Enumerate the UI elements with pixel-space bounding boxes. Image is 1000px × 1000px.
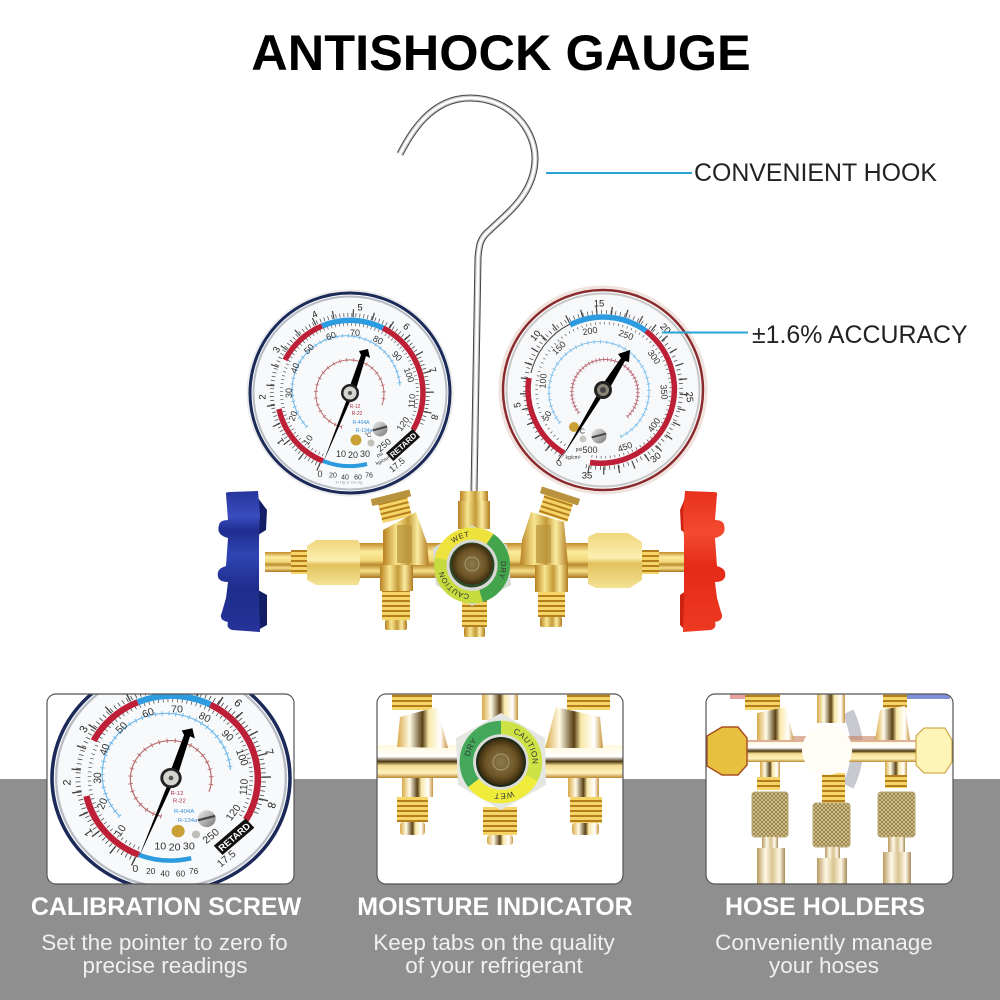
zoomed gauge: 0	[132, 864, 138, 875]
text: calibration screw: precise readings	[82, 953, 248, 978]
indicator ring: CAUTION	[514, 728, 538, 764]
zoomed gauge: 60	[176, 870, 186, 878]
inner numbers: 30	[284, 388, 294, 398]
zoomed gauge: 5	[180, 676, 186, 688]
indicator ring: WET	[494, 792, 515, 800]
numbers: 35	[582, 470, 592, 482]
inner numbers: 80	[371, 333, 385, 347]
zoomed gauge: 2	[61, 780, 74, 786]
left gauge	[248, 290, 452, 496]
inner numbers: in Hg or cm Hg	[336, 480, 362, 484]
refrigerant scales	[292, 336, 400, 427]
numbers: kg/cm²	[566, 455, 581, 461]
hook	[400, 98, 535, 492]
numbers: 20	[657, 321, 673, 337]
text: calibration screw: CALIBRATION SCREW	[31, 893, 302, 921]
outer numbers: 1	[275, 436, 287, 446]
text: calibration screw	[31, 893, 302, 978]
inner numbers: 40	[289, 362, 301, 374]
needle	[323, 349, 370, 463]
text: moisture indicator	[357, 893, 633, 978]
left stem	[265, 550, 307, 574]
pressure band	[528, 317, 674, 463]
outer numbers: 8	[428, 413, 440, 421]
indicator ring: DRY	[464, 738, 476, 756]
inner numbers: 10	[301, 433, 315, 447]
zoomed gauge	[50, 694, 292, 884]
pressure band	[279, 320, 423, 466]
numbers: °C	[577, 428, 585, 436]
text: hose holders: Conveniently manage	[715, 930, 933, 955]
zoomed gauge: 20	[146, 867, 156, 876]
right flare nut	[588, 533, 642, 588]
centre stem	[458, 491, 490, 637]
inner numbers: R-404A	[353, 420, 370, 426]
zoomed gauge: 30	[183, 842, 195, 852]
text: moisture indicator: MOISTURE INDICATOR	[357, 893, 633, 921]
text: moisture indicator: Keep tabs on the quality	[373, 930, 615, 955]
refrigerant scales	[549, 342, 649, 437]
needle	[561, 350, 630, 459]
numbers: 5	[512, 401, 524, 409]
inner numbers: 0	[317, 469, 323, 479]
inner numbers: psi	[376, 451, 384, 459]
numbers: 200	[582, 325, 598, 337]
numbers	[512, 298, 695, 482]
text: hose holders: HOSE HOLDERS	[725, 893, 925, 921]
inner numbers: R-22	[352, 411, 363, 417]
inner numbers	[284, 328, 418, 484]
inner numbers: 250	[375, 436, 393, 454]
numbers: 300	[646, 348, 662, 366]
inner numbers: 110	[406, 393, 418, 409]
inner numbers: 30	[360, 449, 370, 459]
zoomed gauge: 10	[154, 842, 166, 852]
zoomed gauge: 20	[96, 797, 111, 811]
zoomed gauge: R-12	[171, 791, 183, 797]
zoomed gauge: 50	[114, 720, 131, 736]
inner numbers: 100	[402, 366, 416, 384]
inner numbers: 70	[350, 328, 360, 338]
numbers: 350	[658, 384, 670, 400]
zoomed gauge: R-404A	[174, 809, 194, 815]
indicator ring	[456, 713, 546, 810]
outer numbers: 7	[426, 366, 438, 374]
right stem	[642, 550, 684, 574]
calibration screw	[569, 422, 606, 444]
moisture indicator: WET	[450, 532, 468, 542]
inner numbers: 20	[287, 410, 299, 422]
zoomed gauge: 60	[141, 707, 156, 721]
numbers: 100	[537, 373, 549, 389]
title: ANTISHOCK GAUGE	[251, 24, 751, 81]
zoomed gauge: 20	[169, 843, 181, 853]
zoomed gauge: 70	[171, 705, 183, 716]
zoomed gauge: R-134a	[178, 818, 198, 824]
outer numbers: 4	[310, 309, 320, 321]
retard tag: RETARD	[388, 431, 419, 460]
manifold body	[218, 446, 726, 637]
zoomed gauge: 7	[262, 748, 275, 756]
right gauge	[500, 287, 706, 493]
zoomed gauge: RETARD	[217, 821, 253, 853]
callout: accuracy: ±1.6% ACCURACY	[752, 321, 968, 349]
outer numbers: 5	[357, 302, 363, 314]
numbers: 15	[594, 298, 604, 310]
zoomed gauge: 17.5	[215, 849, 239, 870]
zoomed gauge: 10	[113, 823, 129, 839]
zoomed gauge: 76	[189, 867, 199, 876]
zoomed gauge: 8	[264, 801, 278, 810]
grey band	[0, 779, 1000, 1000]
bezel	[500, 287, 706, 493]
numbers: 25	[683, 391, 695, 403]
left valve body	[371, 490, 429, 630]
numbers: 450	[616, 440, 634, 454]
numbers: 50	[540, 409, 554, 423]
inner numbers: R-12	[350, 404, 361, 410]
tick scales	[524, 310, 684, 470]
panel: moisture indicator	[376, 693, 624, 885]
zoomed gauge: R-22	[173, 799, 186, 805]
numbers: 250	[617, 328, 635, 342]
inner numbers: 20	[329, 472, 337, 480]
text: hose holders	[715, 893, 933, 978]
inner numbers: 76	[365, 472, 373, 480]
moisture indicator: CAUTION	[439, 572, 469, 599]
inner numbers: °C	[365, 433, 372, 439]
numbers: 150	[550, 339, 568, 357]
zoomed gauge: 3	[77, 724, 91, 735]
zoomed gauge: 80	[197, 711, 212, 725]
zoomed gauge: 6	[231, 697, 244, 710]
text: moisture indicator: of your refrigerant	[405, 953, 584, 978]
inner numbers: 120	[395, 415, 411, 433]
zoomed gauge: 40	[160, 870, 170, 878]
inner numbers: 60	[325, 330, 337, 342]
inner numbers: R-134a	[356, 428, 372, 434]
brass close-up	[378, 694, 622, 845]
moisture indicator: DRY	[499, 562, 506, 579]
inner numbers: 17.5	[387, 456, 407, 474]
left flare nut	[307, 540, 360, 585]
bezel	[248, 290, 452, 496]
zoomed gauge: 40	[98, 742, 113, 757]
inner numbers: kg/cm²	[375, 455, 391, 467]
zoomed gauge: 110	[238, 778, 251, 796]
outer numbers: 6	[400, 321, 412, 333]
zoomed gauge: 90	[219, 728, 235, 744]
inner numbers: 60	[354, 474, 362, 482]
text: hose holders: your hoses	[769, 953, 879, 978]
main pipe	[358, 543, 590, 578]
outer numbers: 3	[271, 345, 283, 355]
text: calibration screw: Set the pointer to zero fo	[41, 930, 288, 955]
outer numbers: 2	[258, 394, 268, 400]
zoomed gauge: 120	[224, 803, 244, 823]
panel: hose holders	[706, 694, 953, 884]
right valve body	[520, 486, 580, 627]
zoomed gauge: 1	[82, 826, 96, 838]
numbers: psi	[576, 447, 582, 453]
numbers: 10	[528, 328, 544, 344]
thin black arc	[531, 324, 570, 373]
inner numbers: 40	[341, 474, 349, 482]
inner numbers: 90	[390, 349, 404, 363]
panel: calibration screw	[46, 693, 295, 885]
numbers: 30	[648, 450, 664, 466]
inner numbers: 10	[336, 449, 346, 459]
zoomed gauge: 30	[93, 772, 104, 784]
blue knob	[218, 491, 267, 632]
numbers: 0	[554, 457, 564, 469]
tick scales	[270, 313, 430, 467]
inner numbers: 50	[302, 342, 316, 356]
outer numbers	[258, 302, 440, 446]
red knob	[680, 491, 725, 632]
numbers: 500	[582, 445, 598, 455]
calibration screw	[350, 422, 388, 446]
moisture indicator	[433, 525, 511, 606]
callout: convenient hook: CONVENIENT HOOK	[694, 159, 937, 187]
hose fittings close-up	[707, 694, 952, 884]
zoomed gauge: 100	[233, 748, 250, 768]
zoomed gauge: 250	[201, 827, 222, 846]
inner numbers: 20	[348, 450, 358, 460]
numbers: 400	[646, 416, 662, 434]
